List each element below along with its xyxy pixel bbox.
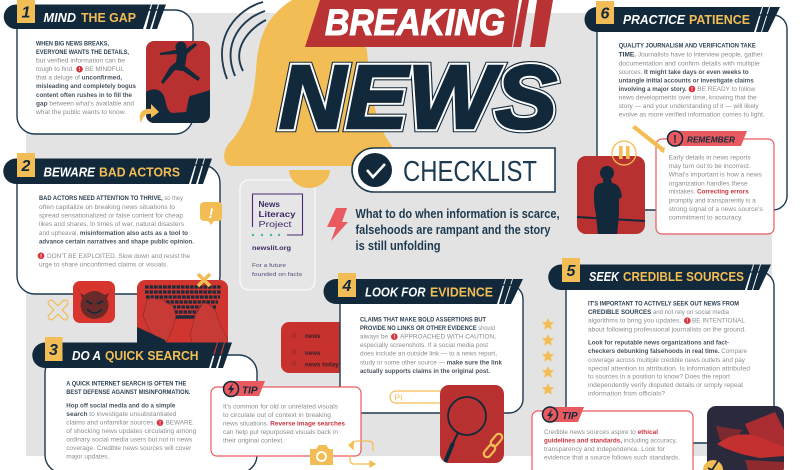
text 6: sources. It might take days or even weeks to [619,69,749,76]
callout: remember: strong signal of a news source's [669,206,763,213]
panel 2: beware bad actors [3,153,228,355]
text 4: actually supports claims in the original post. [360,368,490,375]
icon: bell sound waves [222,2,266,79]
remember label: ! [673,134,677,146]
logo card: News Literacy Project: News [258,200,280,209]
checklist pill: CHECKLIST [403,156,537,188]
subtitle: What to do when information is scarce, [356,206,560,221]
icon: alert bubble [200,202,222,225]
tip box: reverse image searches: to circulate out of context in breaking [223,412,331,419]
callout: remember: commitment to accuracy. [669,214,743,221]
icon: swap arrows [349,441,375,467]
banner: BREAKING [305,0,553,47]
red search suggestion card: news [305,333,321,340]
text 3: search to investigate unsubstantiated [66,411,177,418]
text 5: ! [686,319,688,325]
text 5 [588,300,750,398]
tip label [224,381,265,396]
icon: lightning [327,208,348,241]
icon: chain link [482,432,504,459]
tip box: ethical guidelines: Credible news sources aspire to ethical [544,429,658,436]
text 2: urge to share unconfirmed claims or visuals. [39,262,168,269]
text 3: coverage. Credible news sources will cover [66,445,192,452]
image: hands on keyboard [137,280,228,355]
panel 3: do a quick search [32,337,257,470]
panel 6: practice patience [584,1,787,210]
text 1: misleading and completely bogus [36,83,136,90]
callout: remember: Early details in news reports [669,155,751,162]
icon: camera [310,445,333,465]
text 6: documentation and confirm details with multiple [619,60,760,67]
text 4: always be [360,334,388,341]
image: silhouette of waiting person [577,156,645,236]
link pill [390,391,452,403]
header 4: LOOK FOR [365,285,426,300]
tip label 2: TIP [562,411,578,422]
text 3: of shocking news updates circulating among [66,428,197,435]
link pill: PI [394,392,403,402]
text 5: algorithms to bring you updates. [588,318,681,325]
text 5: independently verify disputed details or simply repeat [588,382,743,389]
tip box: ethical guidelines: guidelines and standards, including accuracy, [544,437,677,444]
text 5: Look for reputable news organizations and fact- [588,339,729,346]
callout: remember: organization handles these [669,180,748,187]
header 6: PATIENCE [689,12,750,27]
header 6: 6 [601,6,610,22]
logo card: News Literacy Project: founded on facts [252,272,302,278]
title: NEWS: NEWS [279,48,557,148]
header 3: DO A [72,348,101,363]
header 5: SEEK [589,269,620,284]
image: magnifying glass [440,385,504,465]
icon: pause [612,141,636,165]
header 5: CREDIBLE SOURCES [623,269,744,284]
text 1: gap between what's available and [36,100,134,107]
callout: remember [656,131,774,234]
text 4: especially screenshots. If a social media post [360,342,488,349]
red search suggestion card: news today [305,362,339,368]
text 3: major updates. [66,454,110,461]
header 6 [584,1,780,32]
subtitle: falsehoods are rampant and the story [356,222,551,237]
subtitle [356,206,560,253]
text 6: QUALITY JOURNALISM AND VERIFICATION TAKE [619,43,756,50]
title: NEWS: NEWS [279,48,557,148]
callout: remember: mistakes. Correcting errors [669,189,749,196]
text 6 [619,43,765,119]
text 2: and upheaval, misinformation also acts as a tool to [39,230,188,237]
text 3 [66,380,197,461]
panel 4: look for evidence [281,273,523,465]
text 2: DON'T BE EXPLOITED. Slow down and resist the [47,253,190,260]
text 3: A QUICK INTERNET SEARCH IS OFTEN THE [66,380,187,387]
text 5: to sources in a position to know? Does the report [588,374,730,381]
text 5: checkers debunking falsehoods in real time. Compare [588,348,747,355]
logo card: News Literacy Project: newslit.org [252,245,291,252]
text 1: tough to find. [36,66,74,73]
header 5 [548,258,771,290]
text 1: ! [79,67,81,73]
header 2: 2 [21,158,31,175]
header 6: PRACTICE [623,12,685,27]
callout: remember: What's important is how a news [669,172,762,179]
text 3: BEST DEFENSE AGAINST MISINFORMATION. [66,389,190,396]
tip label 2 [542,407,584,422]
text 6: TIME. Journalists have to interview people, gather [619,52,764,59]
text 3: ! [159,421,161,427]
logo card: News Literacy Project: Project [258,220,292,229]
text 3: claims and unfamiliar sources. [66,420,156,427]
red search suggestion card: news [305,350,321,357]
header 2: BAD ACTORS [99,165,180,180]
panel 1: mind the gap [4,0,210,134]
icon: yellow check badge [703,460,723,470]
icon: outlined X [51,303,65,317]
tip box: reverse image searches: news situations. Reverse image searches [223,421,345,428]
text 4: CLAIMS THAT MAKE BOLD ASSERTIONS BUT [360,316,486,323]
icon: five stars [542,318,554,395]
text 2 [38,195,194,269]
image: person jumping the gap [146,41,210,123]
text 1 [35,40,136,116]
icon: pencil [632,125,665,153]
tip box: reverse image searches: It's common for old or unrelated visuals [223,404,338,411]
text 4: does include an outside link — to a news report, [360,350,497,358]
header 3: 3 [49,342,58,359]
tip label: TIP [242,386,258,396]
icon: solid X [198,274,210,286]
text 2: likes and shares. In times of war, natural disasters [39,221,184,228]
text 5: coverage across multiple credible news outlets and pay [588,357,746,364]
remember label: REMEMBER [687,134,736,144]
text 1: what the public wants to know. [35,109,126,116]
text 6: story — and your understanding of it — will likely [619,103,760,110]
text 1: but verified information can be [36,58,125,65]
logo card: News Literacy Project [240,180,315,290]
header 4: EVIDENCE [430,285,493,300]
text 4: ! [393,335,395,341]
text 5: about following professional journalists on the ground. [588,326,746,333]
text 5: CREDIBLE SOURCES and not rely on social media [588,309,729,316]
panel 5: seek credible sources [548,258,774,443]
header 1: THE GAP [81,10,136,25]
tip box: reverse image searches: their original context. [223,437,284,444]
illustration: yellow bell [224,0,392,166]
tip box: reverse image searches [211,381,361,456]
header 3: QUICK SEARCH [105,348,198,363]
text 2: advance certain narratives and shape public opinion. [39,238,194,245]
logo card: News Literacy Project: For a future [252,263,286,269]
subtitle: is still unfolding [356,238,441,253]
text 4: PROVIDE NO LINKS OR OTHER EVIDENCE should [360,325,495,332]
text 2: often capitalize on breaking news situations to [39,204,175,211]
red search suggestion card [281,322,351,373]
text 5: IT'S IMPORTANT TO ACTIVELY SEEK OUT NEWS FROM [588,300,739,307]
tip box: ethical guidelines: evidence that a source follows such standards. [544,455,680,462]
checklist pill [352,148,555,192]
text 4 [360,316,502,375]
text 6: news developments over time, knowing that the [619,95,757,102]
text 1: BE MINDFUL [85,66,124,73]
icon: devil emoji [73,281,115,323]
icon: alert bubble: ! [209,205,214,221]
header 1: 1 [22,4,31,22]
text 4: study or some other source — make sure the link [360,359,502,366]
callout: remember: may turn out to be incorrect. [669,163,751,170]
header 3 [32,337,232,368]
text 6: evolve as more verified information comes to light. [619,112,765,119]
text 5: information from officials? [588,391,665,398]
text 3: BEWARE [166,420,193,427]
text 6: ! [691,87,693,93]
header 4: 4 [342,278,352,295]
text 3: Hop off social media and do a simple [66,402,176,409]
text 6: involving a major story. [619,86,687,93]
text 5: special attention to attribution. Is information attributed [588,365,750,372]
text 6: BE READY to follow [697,86,756,93]
bell clapper [289,170,330,188]
title: NEWS: NEWS [279,48,557,148]
tip box: reverse image searches: can help put repurposed visuals back in [223,429,338,436]
text 1: that a deluge of unconfirmed, [36,75,122,82]
header 1 [4,0,166,29]
header 4 [324,273,523,304]
header 1: MIND [44,10,77,25]
image: hands holding documents [707,406,784,470]
header 2: BEWARE [44,165,95,180]
text 1: content often rushes in to fill the [36,92,132,99]
callout: remember: promptly and transparently is a [669,197,756,204]
text 6: untangle initial accounts or investigate claims [619,78,754,85]
tip box: ethical guidelines [532,407,693,470]
text 2: spread sensationalized or false content for cheap [39,212,183,220]
text 3: ordinary social media users but not in news [66,437,192,444]
text 1: WHEN BIG NEWS BREAKS, [36,40,109,48]
header 5: 5 [567,263,577,280]
text 4: APPROACHED WITH CAUTION, [400,334,496,341]
text 2: ! [40,254,42,260]
header 2 [3,153,212,184]
logo card: News Literacy Project: Literacy [258,210,296,219]
text 2: BAD ACTORS NEED ATTENTION TO THRIVE, so they [39,195,184,202]
text 5: BE INTENTIONAL [692,318,745,325]
text 1: EVERYONE WANTS THE DETAILS, [36,49,129,56]
icon: curved arrow [140,104,159,123]
banner: BREAKING: BREAKING [325,2,505,43]
tip box: ethical guidelines: transparency and independence. Look for [544,446,666,453]
remember label [668,131,747,146]
